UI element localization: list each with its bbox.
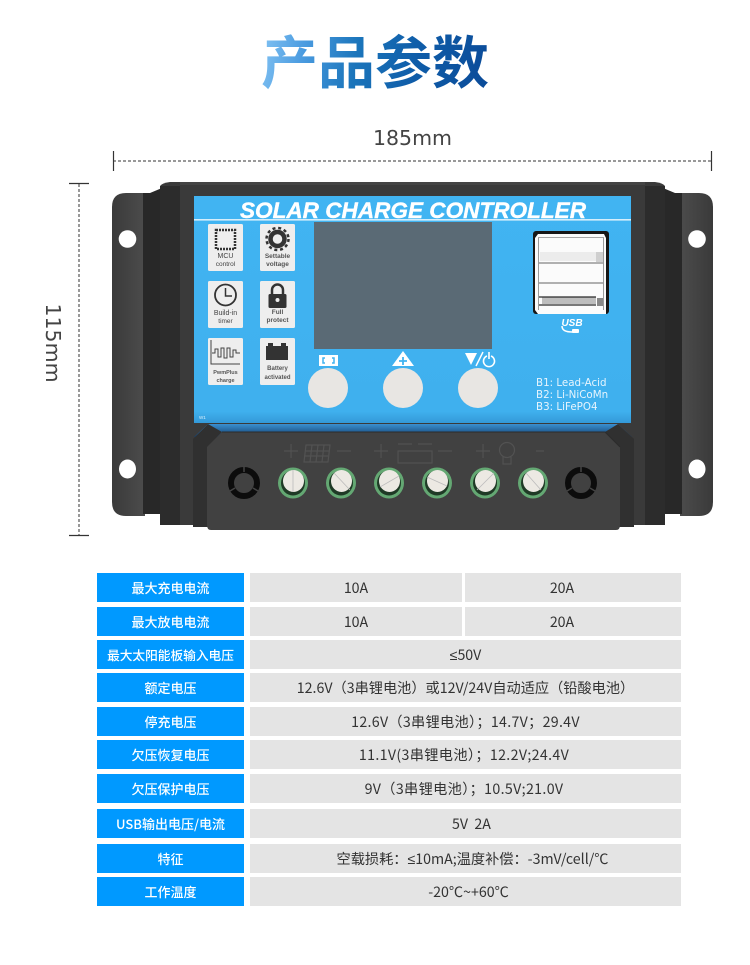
panel heading: SOLAR CHARGE CONTROLLER (240, 198, 586, 223)
battery type list (536, 377, 608, 413)
terminal block (193, 424, 634, 530)
blue front panel (194, 196, 631, 423)
screw terminal 4 (422, 468, 452, 498)
spec row: undervoltage recovery: 欠压恢复电压 (131, 745, 210, 764)
spec row: stop-charge voltage (97, 707, 681, 736)
feature tile: battery activated: activated (264, 375, 291, 381)
spec row: max discharge current: 10A (344, 612, 368, 632)
controller body (112, 182, 713, 530)
LCD screen (314, 222, 492, 349)
spec row: working temperature: 工作温度 (144, 882, 196, 901)
feature tile: battery activated (260, 338, 295, 385)
screw terminal 6 (518, 468, 548, 498)
feature tile: full protect (260, 281, 295, 328)
terminal symbols (284, 442, 544, 464)
feature tile: settable voltage: voltage (266, 261, 289, 268)
spec row: max charge current: 10A (344, 578, 368, 598)
spec row: rated voltage: 12.6V（3串锂电池）或12V/24V自动适应（铅酸电池） (297, 678, 634, 698)
feature tile: built-in timer: Build-in (214, 310, 237, 317)
spec row: stop-charge voltage: 12.6V（3串锂电池）；14.7V；29.4V (351, 712, 580, 732)
width dimension: 185mm (373, 126, 452, 150)
feature tile: built-in timer: timer (218, 318, 234, 325)
dark ring left (230, 466, 258, 496)
mounting ears (112, 188, 713, 516)
spec row: undervoltage protection: 欠压保护电压 (131, 779, 210, 798)
feature tile: MCU control (208, 224, 243, 271)
spec row: USB output: USB输出电压/电流 (116, 814, 225, 833)
spec row: features: 特征 (157, 849, 184, 868)
title: 产品参数 (261, 18, 489, 100)
spec row: undervoltage recovery (97, 740, 681, 769)
battery type list: B3: LiFePO4 (536, 401, 598, 413)
feature tile: MCU control: MCU (218, 253, 233, 260)
spec row: features: 空载损耗：≤10mA;温度补偿：-3mV/cell/℃ (336, 849, 608, 869)
spec row: USB output (97, 809, 681, 838)
spec row: max discharge current: 20A (550, 612, 574, 632)
spec row: working temperature (97, 877, 681, 906)
button label: down and power (465, 352, 494, 367)
feature tile: full protect: Full (272, 309, 283, 316)
feature tile: built-in timer (208, 281, 243, 328)
button: middle (383, 368, 423, 408)
button label: mode (319, 355, 338, 366)
button: right (458, 368, 498, 408)
screw terminal 2 (326, 468, 356, 498)
dark ring right (567, 466, 595, 496)
feature tile: MCU control: control (216, 261, 236, 268)
feature tile: PwmPlus charge: PwmPlus (213, 370, 238, 376)
spec row: rated voltage: 额定电压 (144, 678, 196, 697)
battery type list: B1: Lead-Acid (536, 377, 607, 389)
model mark: W1 (199, 415, 206, 420)
screw terminal 1 (278, 468, 308, 498)
feature tile: PwmPlus charge: charge (216, 378, 235, 384)
spec row: max charge current: 20A (550, 578, 574, 598)
button label: plus (392, 351, 414, 366)
spec row: stop-charge voltage: 停充电压 (144, 712, 196, 731)
button: left (308, 368, 348, 408)
spec row: working temperature: -20℃~+60℃ (428, 882, 509, 902)
feature tile: settable voltage: Settable (265, 253, 291, 260)
USB ports (533, 231, 609, 314)
spec row: undervoltage protection (97, 774, 681, 803)
spec row: USB output: 5V 2A (452, 814, 491, 834)
spec row: undervoltage protection: 9V（3串锂电池）；10.5V;21.0V (365, 779, 563, 799)
screw terminal 3 (374, 468, 404, 498)
feature tile: battery activated: Battery (267, 366, 288, 372)
spec row: rated voltage (97, 673, 681, 702)
height dimension: 115mm (41, 303, 65, 383)
spec row: max solar input voltage: ≤50V (450, 645, 481, 665)
USB logo: USB (561, 318, 583, 329)
feature tile: full protect: protect (266, 317, 289, 324)
battery type list: B2: Li-NiCoMn (536, 389, 608, 401)
spec row: max solar input voltage: 最大太阳能板输入电压 (107, 645, 234, 664)
feature tile: PwmPlus charge (208, 338, 243, 385)
spec row: max solar input voltage (97, 640, 681, 669)
spec row: features (97, 844, 681, 873)
product diagram with dimensions (41, 126, 713, 536)
spec row: max charge current (97, 573, 681, 602)
spec row: undervoltage recovery: 11.1V(3串锂电池）；12.2V;24.4V (359, 745, 569, 765)
screw terminal 5 (470, 468, 500, 498)
feature tile: settable voltage (260, 224, 295, 271)
main housing (160, 182, 665, 525)
spec row: max discharge current: 最大放电电流 (131, 612, 210, 631)
spec row: max discharge current (97, 607, 681, 636)
spec row: max charge current: 最大充电电流 (131, 578, 210, 597)
